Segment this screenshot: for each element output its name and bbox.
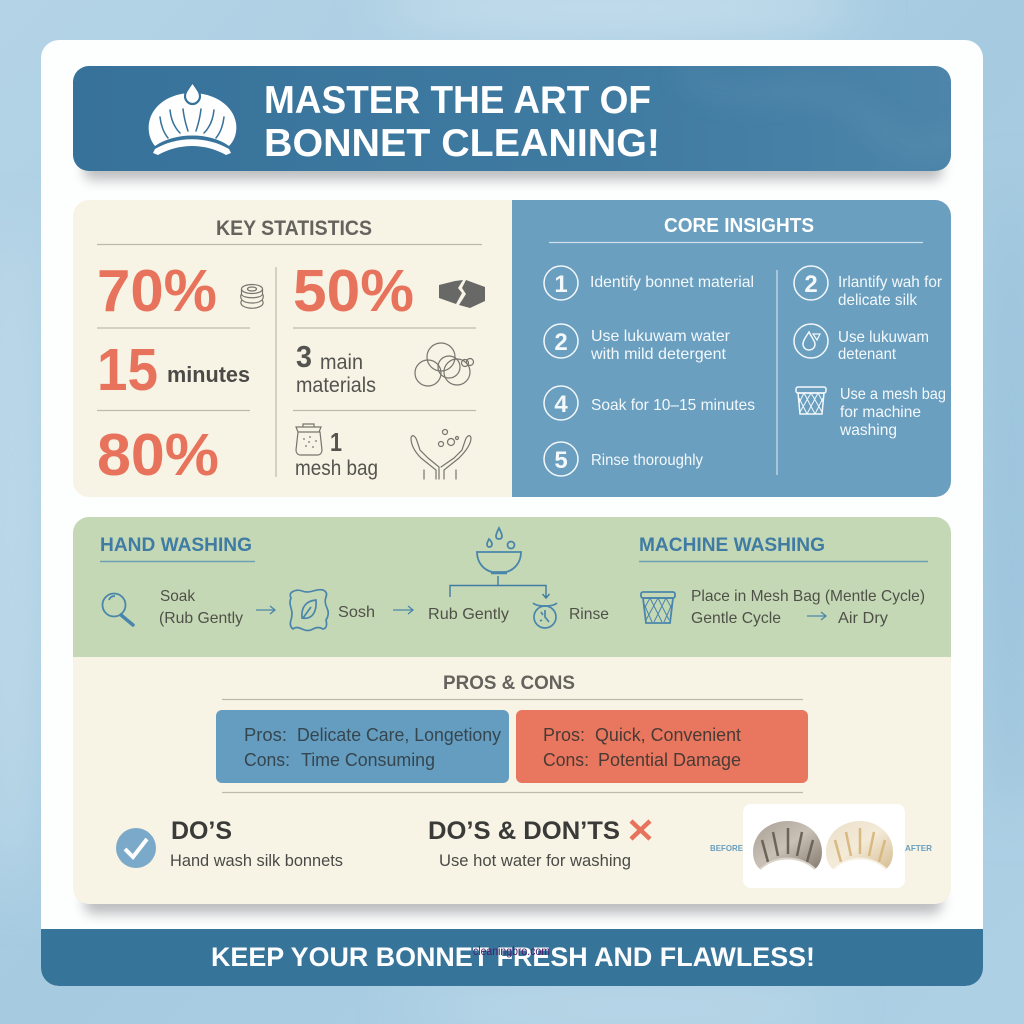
do's and don'ts	[428, 817, 650, 870]
icon: bonnet with water drop	[149, 82, 236, 155]
stat: 15 minutes	[97, 337, 250, 403]
insight 2: Use lukuwam water	[591, 328, 731, 345]
stat: 3 main materials: main	[320, 351, 363, 374]
card: hand washing pros and cons: Pros:	[244, 725, 287, 745]
watermark: cleaningbro.com	[473, 946, 550, 958]
insight: detergent	[794, 324, 929, 363]
icon: coin stack	[241, 284, 263, 308]
icon: fabric with leaf	[290, 590, 328, 630]
arrow	[393, 606, 413, 614]
before and after photo	[743, 804, 905, 888]
insight: mesh bag	[796, 386, 946, 439]
card: hand washing pros and cons: Delicate Care, Longetiony	[297, 725, 501, 745]
icon: torn fabric	[439, 280, 485, 308]
arrow	[256, 606, 275, 614]
do's and don'ts: DO’S & DON’TS	[428, 817, 620, 845]
icon: magnifier	[102, 594, 133, 625]
heading: core insights: CORE INSIGHTS	[664, 215, 814, 237]
step: machine washing	[691, 588, 925, 627]
do's: DO’S	[171, 817, 232, 845]
insight: mesh bag: washing	[839, 422, 897, 439]
insight 4: Soak for 10–15 minutes	[591, 397, 755, 414]
insight 1	[544, 266, 754, 300]
panel: pros, cons, dos and don'ts	[73, 657, 951, 904]
step: soak: (Rub Gently	[159, 610, 243, 627]
footer banner	[41, 929, 983, 986]
do's: Hand wash silk bonnets	[170, 852, 343, 870]
card: machine washing pros and cons: Potential Damage	[598, 750, 741, 770]
icon: cross	[631, 821, 650, 839]
insight: mesh bag: Use a mesh bag	[840, 386, 946, 403]
insight 2: 2	[554, 329, 568, 356]
stat: 3 main materials	[296, 339, 376, 397]
insight: delicate silk	[794, 266, 943, 309]
insight 2: with mild detergent	[590, 346, 727, 363]
step: rub gently: Rub Gently	[428, 606, 509, 623]
stat: 15 minutes: minutes	[167, 362, 250, 387]
insight: delicate silk: Irlantify wah for	[838, 274, 943, 291]
stat: 1 mesh bag: 1	[330, 427, 342, 457]
stat: 1 mesh bag	[295, 427, 378, 480]
step: machine washing: Place in Mesh Bag (Mentle Cycle)	[691, 588, 925, 605]
heading: key statistics: KEY STATISTICS	[216, 217, 372, 240]
insight 2	[544, 324, 731, 363]
card: hand washing pros and cons: Cons:	[244, 750, 290, 770]
insight: delicate silk: 2	[804, 271, 818, 298]
step: machine washing: Gentle Cycle	[691, 610, 781, 627]
stat: 3 main materials: 3	[296, 339, 312, 374]
icon: bowl with drops	[477, 528, 521, 573]
heading: hand washing: HAND WASHING	[100, 534, 252, 556]
title	[264, 79, 660, 165]
step: soak: Soak	[160, 588, 196, 605]
heading: machine washing: MACHINE WASHING	[639, 534, 825, 556]
stat: 3 main materials: materials	[296, 374, 376, 397]
stat: 80%: 80%	[97, 422, 219, 488]
panel: core insights	[512, 200, 951, 497]
bonnet: before	[753, 821, 822, 869]
card: hand washing pros and cons	[216, 710, 509, 783]
step: soak	[159, 588, 243, 627]
insight 1: Identify bonnet material	[590, 274, 754, 291]
icon: washing hands	[411, 430, 471, 479]
stat: 1 mesh bag: mesh bag	[295, 457, 378, 480]
stat: 50%: 50%	[293, 258, 414, 324]
insight 4: 4	[554, 391, 568, 418]
panel: key statistics	[73, 200, 512, 497]
lower panel shadow	[84, 890, 942, 914]
bonnet: after	[826, 821, 893, 869]
icon: mesh bag jar	[296, 424, 322, 455]
step: machine washing: Air Dry	[838, 610, 888, 627]
icon: check mark	[116, 828, 156, 868]
insight 5: Rinse thoroughly	[591, 452, 703, 469]
arrow: bracket from bowl	[450, 576, 550, 598]
insight: delicate silk: delicate silk	[838, 292, 918, 309]
step: sosh: Sosh	[338, 604, 375, 621]
card: machine washing pros and cons: Pros:	[543, 725, 585, 745]
insight 5	[544, 442, 703, 476]
insight 1: 1	[554, 271, 568, 298]
insight 5: 5	[554, 447, 568, 474]
do's	[170, 817, 343, 870]
header banner	[73, 66, 960, 180]
card: hand washing pros and cons: Time Consuming	[301, 750, 435, 770]
card: machine washing pros and cons	[516, 710, 808, 783]
after label: AFTER	[905, 843, 932, 853]
do's and don'ts: Use hot water for washing	[439, 852, 631, 870]
icon: timer	[533, 603, 557, 628]
card: machine washing pros and cons: Cons:	[543, 750, 589, 770]
footer text: KEEP YOUR BONNET FRESH AND FLAWLESS!	[211, 942, 815, 972]
title: MASTER THE ART OF	[264, 79, 651, 122]
step: rinse: Rinse	[569, 606, 609, 623]
title: BONNET CLEANING!	[264, 122, 660, 165]
insight: detergent: detenant	[838, 346, 897, 363]
insight 4	[544, 386, 755, 420]
before label: BEFORE	[710, 843, 743, 853]
card: machine washing pros and cons: Quick, Convenient	[595, 725, 741, 745]
insight: mesh bag: for machine	[840, 404, 921, 421]
icon: laundry basket	[641, 592, 675, 623]
stat: 70%: 70%	[97, 258, 217, 324]
icon: overlapping rings	[415, 343, 474, 386]
panel: washing methods	[73, 517, 951, 657]
heading: pros and cons: PROS & CONS	[443, 673, 575, 694]
stat: 15 minutes: 15	[97, 337, 158, 403]
insight: detergent: Use lukuwam	[838, 329, 929, 346]
